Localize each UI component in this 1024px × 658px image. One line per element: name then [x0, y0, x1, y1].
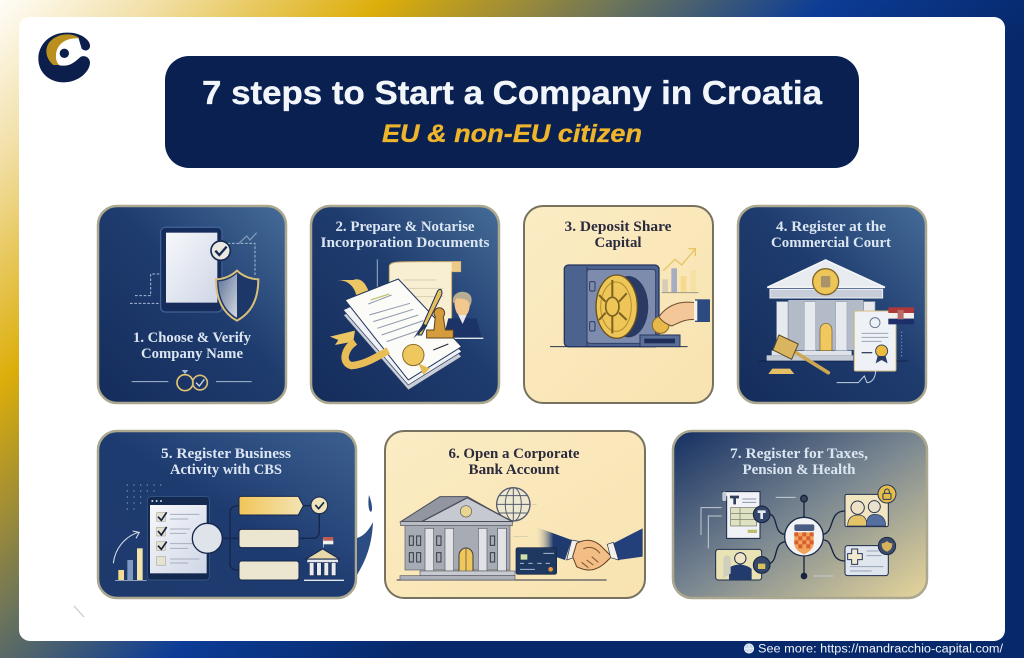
text: step 7 label — [730, 446, 868, 478]
icon: courthouse, gavel, certificate and flag — [758, 260, 914, 383]
text: step 3 label: 3. Deposit Share — [564, 219, 672, 235]
text: step 5 label: 5. Register Business — [161, 446, 291, 462]
panel: step 4 — [738, 206, 926, 403]
icon: tax, pension and health network — [701, 485, 896, 580]
text: step 6 label: 6. Open a Corporate — [448, 446, 580, 462]
text: step 1 label: 1. Choose & Verify — [133, 330, 251, 346]
panel: step 6 — [385, 431, 645, 598]
text: step 4 label: 4. Register at the — [776, 219, 886, 235]
text: step 7 label: 7. Register for Taxes, — [730, 446, 868, 462]
text: step 4 label: Commercial Court — [771, 235, 891, 251]
logo — [38, 33, 90, 82]
icon: checklist and process flow — [113, 484, 344, 580]
title banner — [165, 56, 859, 168]
text: see more url: See more: https://mandracchio-capital.com/ — [758, 644, 1004, 656]
panel: step 7 — [673, 431, 927, 598]
icon: safe, coin and hand — [550, 249, 710, 347]
text: step 1 label: Company Name — [141, 346, 243, 362]
icon: documents, pen, seal and notary — [330, 259, 483, 390]
text: step 1 label — [133, 330, 251, 362]
text: step 5 label: Activity with CBS — [170, 462, 282, 478]
text: step 2 label — [320, 219, 490, 251]
icon: bank, globe, card and handshake — [397, 488, 643, 580]
text: step 6 label — [448, 446, 580, 478]
text: step 4 label — [771, 219, 891, 251]
decorative faint mark — [74, 606, 84, 617]
panel: step 3 — [524, 206, 713, 403]
text: step 3 label — [564, 219, 672, 251]
decorative blue smudge — [357, 495, 373, 575]
icon: tablet, shield and rings — [130, 227, 258, 391]
text: step 6 label: Bank Account — [468, 462, 560, 478]
panel: step 5 — [98, 431, 356, 598]
text: step 3 label: Capital — [594, 235, 642, 251]
heading: 7 steps to Start a Company in Croatia — [202, 74, 823, 111]
text: step 5 label — [161, 446, 291, 478]
icon: globe — [744, 644, 754, 653]
text: step 2 label: Incorporation Documents — [320, 235, 490, 251]
panel: step 2 — [311, 206, 499, 403]
text: step 7 label: Pension & Health — [742, 462, 856, 478]
subheading: EU & non-EU citizen — [382, 120, 642, 148]
text: step 2 label: 2. Prepare & Notarise — [336, 219, 475, 235]
footer link — [744, 644, 1004, 656]
panel: step 1 — [98, 206, 286, 403]
